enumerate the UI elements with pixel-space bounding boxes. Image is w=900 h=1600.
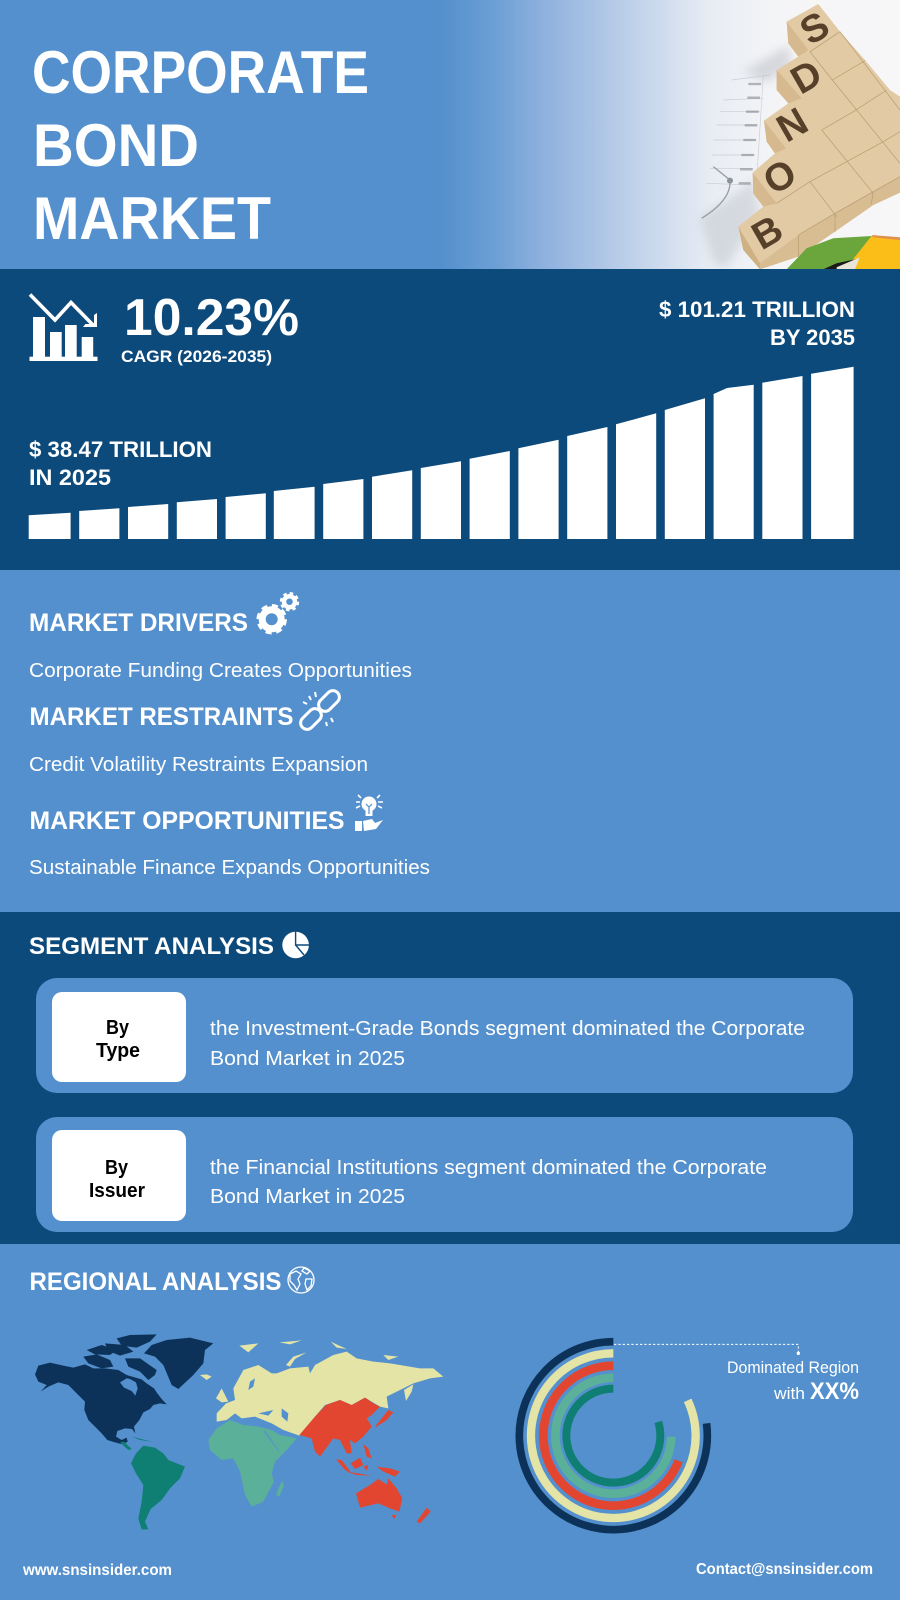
title: CORPORATE — [32, 39, 369, 106]
panel: market dynamics — [29, 593, 430, 879]
icon: pie chart — [282, 931, 310, 958]
icon: declining chart — [30, 294, 98, 361]
bar chart: growth — [29, 367, 854, 539]
panel: header — [0, 0, 900, 270]
heading: market drivers: MARKET DRIVERS — [29, 609, 248, 637]
icon: bulb in hand — [355, 795, 383, 831]
map: north america — [35, 1334, 213, 1444]
panel: regional analysis — [30, 1267, 859, 1530]
panel: market size — [0, 269, 900, 570]
callout: dominated region: XX% — [810, 1378, 859, 1405]
icon: broken chain — [298, 688, 342, 732]
title: MARKET — [33, 185, 271, 252]
icon: gears — [258, 593, 298, 633]
2025 value: $ 38.47 TRILLION — [29, 437, 212, 462]
map: red sea — [263, 1430, 280, 1452]
text: driver: Corporate Funding Creates Opportunities — [29, 660, 412, 682]
2035 value: BY 2035 — [770, 325, 855, 350]
map: south america — [120, 1437, 185, 1529]
2025 value: IN 2025 — [29, 465, 111, 490]
callout: dominated region — [727, 1358, 859, 1405]
callout: dominated region: Dominated Region — [727, 1358, 859, 1377]
label box: by issuer — [52, 1130, 186, 1221]
footer: website: www.snsinsider.com — [22, 1562, 172, 1579]
photo: wooden BOND cubes — [700, 4, 900, 269]
map: africa and middle east — [208, 1420, 297, 1507]
text: by type: the Investment-Grade Bonds segment dominated the Corporate — [210, 1018, 805, 1040]
2035 value — [659, 297, 855, 350]
text: restraint: Credit Volatility Restraints Expansion — [29, 754, 368, 776]
map: asia pacific — [299, 1398, 431, 1523]
text: by type: Bond Market in 2025 — [210, 1048, 405, 1070]
photo: wooden BOND cubes: O — [756, 151, 804, 203]
title: BOND — [33, 112, 199, 179]
callout: dominated region: with — [773, 1384, 805, 1403]
heading: segment analysis: SEGMENT ANALYSIS — [29, 933, 274, 960]
label box: by type: By — [106, 1017, 130, 1039]
heading: market restraints: MARKET RESTRAINTS — [30, 703, 294, 731]
text: by issuer: Bond Market in 2025 — [210, 1186, 405, 1208]
text: by type — [210, 1018, 805, 1070]
photo: wooden BOND cubes: N — [770, 100, 815, 151]
text: by issuer: the Financial Institutions segment dominated the Corporate — [210, 1157, 767, 1179]
heading: market opportunities: MARKET OPPORTUNITIES — [30, 807, 344, 835]
label box: by issuer: Issuer — [89, 1180, 145, 1202]
photo: wooden BOND cubes: D — [784, 52, 829, 103]
map: americas — [35, 1334, 213, 1529]
label box: by type: Type — [96, 1040, 140, 1062]
heading: regional analysis: REGIONAL ANALYSIS — [30, 1268, 282, 1296]
2025 value — [29, 437, 212, 490]
world map — [35, 1334, 443, 1529]
map: europe and north asia — [200, 1340, 443, 1436]
CAGR label: CAGR (2026-2035) — [121, 347, 272, 366]
map: old world — [200, 1340, 443, 1523]
radial bar chart — [519, 1342, 800, 1530]
icon: globe — [288, 1267, 314, 1293]
text: by issuer — [210, 1157, 767, 1208]
footer: contact: Contact@snsinsider.com — [696, 1561, 873, 1578]
photo: wooden BOND cubes: B — [745, 207, 790, 259]
photo: wooden BOND cubes: S — [793, 4, 837, 54]
title — [32, 39, 369, 252]
label box: by issuer: By — [105, 1157, 129, 1179]
text: opportunity: Sustainable Finance Expands Opportunities — [29, 857, 430, 879]
card: by issuer — [36, 1117, 853, 1232]
card: by type — [36, 978, 853, 1093]
map: inland seas — [248, 1378, 288, 1422]
map: hudson bay — [120, 1378, 138, 1396]
label box: by type — [52, 992, 186, 1082]
2035 value: $ 101.21 TRILLION — [659, 297, 855, 322]
panel: segment analysis — [0, 912, 900, 1244]
CAGR value: 10.23% — [124, 289, 299, 347]
